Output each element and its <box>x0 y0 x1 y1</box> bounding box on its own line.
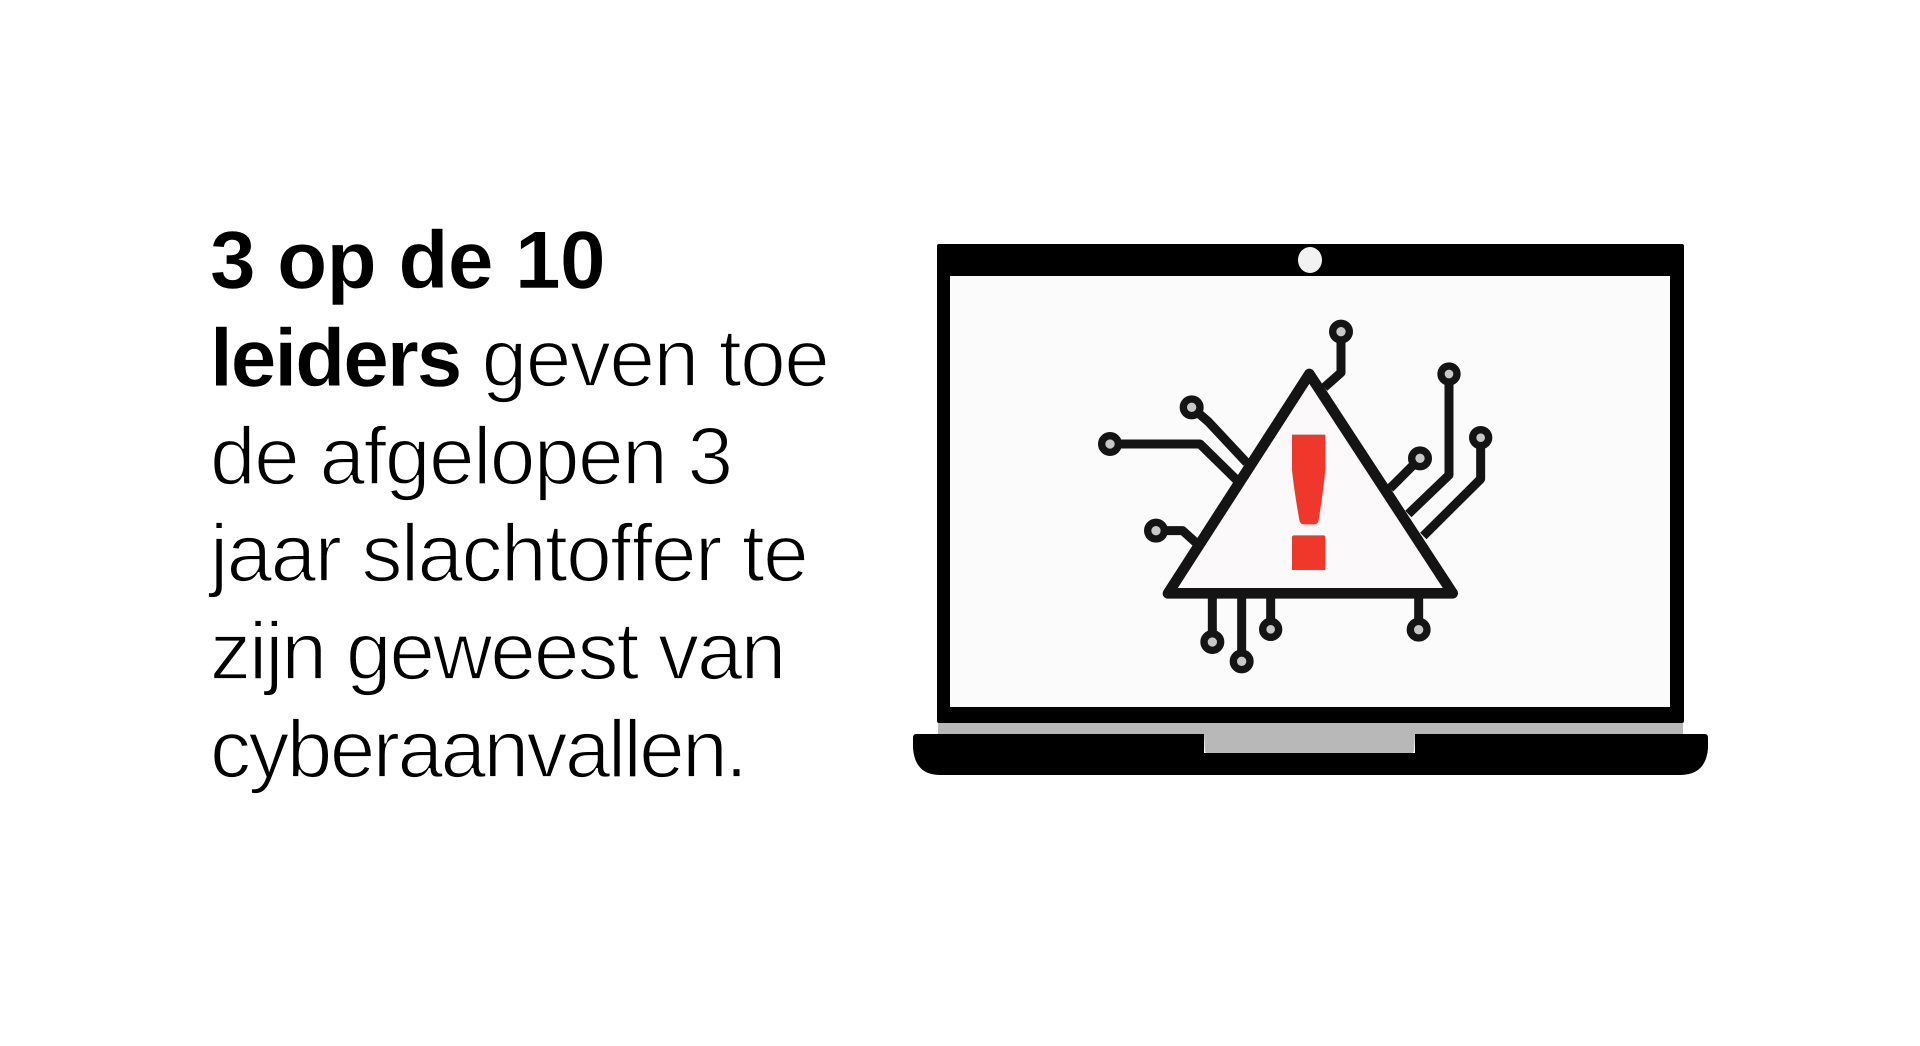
warning triangle <box>1168 374 1453 593</box>
line 1: 3 op de 10 <box>210 215 605 306</box>
text block: statistic statement <box>208 215 828 795</box>
laptop notch <box>1204 734 1415 753</box>
circuit nodes <box>1102 323 1489 670</box>
laptop base <box>913 734 1708 775</box>
line 2: leiders geven toe <box>210 313 828 404</box>
line 5: zijn geweest van <box>210 606 784 697</box>
laptop lid bezel <box>937 244 1684 723</box>
laptop hinge <box>938 723 1683 736</box>
exclamation mark <box>1292 435 1325 570</box>
icon: warning triangle with circuit traces <box>1102 323 1489 670</box>
icon: laptop with warning symbol <box>913 244 1708 775</box>
laptop screen <box>950 276 1670 707</box>
line 6: cyberaanvallen. <box>210 704 745 795</box>
circuit traces <box>1110 332 1481 662</box>
line 3: de afgelopen 3 <box>210 411 732 502</box>
line 4: jaar slachtoffer te <box>210 508 807 599</box>
webcam <box>1298 247 1322 273</box>
